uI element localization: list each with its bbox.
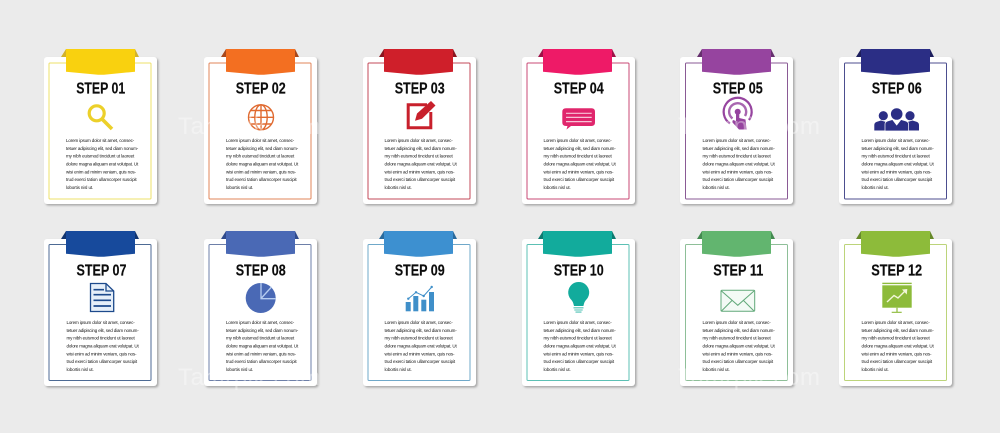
card: step 07: [44, 231, 158, 388]
body text: wisi enim ad minim veniam, quis nos-: [384, 351, 455, 356]
body text: dolore magna aliquam erat volutpat. Ut: [862, 162, 935, 166]
body text: tetuer adipiscing elit, sed diam nonum-: [702, 146, 775, 151]
body text: Lorem ipsum dolor sit amet, consec-: [66, 320, 135, 325]
body text: dolore magna aliquam erat volutpat. Ut: [544, 162, 617, 166]
icon: light bulb: [568, 282, 589, 312]
watermark text: Tamrpik.com: [178, 113, 320, 140]
card: step 12: [839, 231, 954, 388]
body text: my nibh euismod tincidunt ut laoreet: [544, 154, 613, 159]
body text: wisi enim ad minim veniam, quis nos-: [544, 351, 614, 356]
icon: envelope: [721, 290, 755, 311]
body text: dolore magna aliquam erat volutpat. Ut: [226, 344, 299, 348]
watermark text: Tamrpik.com: [178, 364, 320, 391]
card: step 04: [522, 49, 636, 206]
heading: STEP 04: [554, 80, 604, 98]
icon: magnifier: [89, 106, 112, 129]
body text: tetuer adipiscing elit, sed diam nonum-: [862, 328, 934, 333]
heading: STEP 06: [872, 80, 922, 98]
body text: lobortis nisl ut.: [544, 367, 571, 372]
icon: document: [90, 284, 114, 312]
body text: dolore magna aliquam erat volutpat. Ut: [384, 344, 458, 348]
body text: [544, 320, 617, 372]
body text: dolore magna aliquam erat volutpat. Ut: [384, 162, 458, 166]
body text: Lorem ipsum dolor sit amet, consec-: [702, 320, 771, 325]
body text: trud exerci tation ullamcorper suscipit: [384, 177, 456, 182]
body text: my nibh euismod tincidunt ut laoreet: [226, 336, 295, 341]
body text: lobortis nisl ut.: [544, 185, 571, 190]
body text: [702, 138, 776, 190]
icon: team of people: [874, 108, 919, 131]
body text: tetuer adipiscing elit, sed diam nonum-: [384, 328, 457, 333]
heading: STEP 03: [395, 80, 445, 98]
body text: trud exerci tation ullamcorper suscipit: [702, 177, 774, 182]
body text: [66, 320, 140, 372]
heading: STEP 05: [713, 80, 763, 98]
ribbon: [856, 49, 934, 75]
body text: trud exerci tation ullamcorper suscipit: [544, 177, 615, 182]
body text: tetuer adipiscing elit, sed diam nonum-: [702, 328, 775, 333]
ribbon: [61, 49, 139, 75]
body text: trud exerci tation ullamcorper suscipit: [66, 359, 138, 364]
body text: Lorem ipsum dolor sit amet, consec-: [544, 138, 612, 143]
body text: Lorem ipsum dolor sit amet, consec-: [226, 320, 295, 325]
ribbon: [221, 49, 299, 75]
body text: Lorem ipsum dolor sit amet, consec-: [544, 320, 612, 325]
body text: Lorem ipsum dolor sit amet, consec-: [226, 138, 295, 143]
body text: wisi enim ad minim veniam, quis nos-: [226, 169, 296, 174]
card: step 05: [680, 49, 794, 206]
heading: STEP 12: [871, 262, 922, 279]
heading: STEP 01: [76, 80, 125, 98]
body text: [66, 138, 139, 190]
body text: my nibh euismod tincidunt ut laoreet: [544, 336, 613, 341]
body text: Lorem ipsum dolor sit amet, consec-: [384, 320, 453, 325]
body text: [702, 320, 776, 372]
body text: lobortis nisl ut.: [66, 185, 93, 190]
body text: [862, 138, 935, 190]
body text: Lorem ipsum dolor sit amet, consec-: [66, 138, 135, 143]
card: step 01: [44, 49, 158, 206]
card: step 08: [204, 231, 318, 388]
body text: my nibh euismod tincidunt ut laoreet: [862, 154, 931, 159]
body text: lobortis nisl ut.: [66, 367, 94, 372]
body text: trud exerci tation ullamcorper suscipit: [702, 359, 774, 364]
body text: Lorem ipsum dolor sit amet, consec-: [862, 320, 930, 325]
body text: wisi enim ad minim veniam, quis nos-: [66, 169, 136, 174]
ribbon: [856, 231, 934, 257]
body text: dolore magna aliquam erat volutpat. Ut: [66, 162, 139, 166]
body text: trud exerci tation ullamcorper suscipit: [862, 177, 933, 182]
card: step 09: [363, 231, 478, 388]
card: step 06: [839, 49, 954, 206]
body text: my nibh euismod tincidunt ut laoreet: [66, 336, 136, 341]
body text: lobortis nisl ut.: [384, 185, 412, 190]
body text: [544, 138, 617, 190]
body text: dolore magna aliquam erat volutpat. Ut: [702, 344, 776, 348]
body text: Lorem ipsum dolor sit amet, consec-: [384, 138, 453, 143]
ribbon: [61, 231, 139, 257]
body text: lobortis nisl ut.: [862, 185, 889, 190]
body text: wisi enim ad minim veniam, quis nos-: [226, 351, 296, 356]
body text: dolore magna aliquam erat volutpat. Ut: [226, 162, 299, 166]
body text: tetuer adipiscing elit, sed diam nonum-: [544, 146, 616, 151]
body text: Lorem ipsum dolor sit amet, consec-: [862, 138, 930, 143]
icon: globe: [248, 105, 274, 130]
icon: speech bubble: [562, 108, 595, 130]
watermark text: Tamrpik.com: [678, 113, 820, 140]
body text: tetuer adipiscing elit, sed diam nonum-: [66, 146, 139, 151]
body text: Lorem ipsum dolor sit amet, consec-: [702, 138, 771, 143]
ribbon: [379, 49, 457, 75]
body text: tetuer adipiscing elit, sed diam nonum-: [544, 328, 616, 333]
icon: bar chart with trend line: [406, 286, 434, 311]
heading: STEP 11: [713, 262, 764, 279]
watermark text: [178, 113, 820, 391]
icon: touch target: [724, 98, 752, 130]
body text: tetuer adipiscing elit, sed diam nonum-: [66, 328, 139, 333]
body text: trud exerci tation ullamcorper suscipit: [384, 359, 456, 364]
body text: [226, 320, 299, 372]
body text: my nibh euismod tincidunt ut laoreet: [66, 154, 135, 159]
body text: wisi enim ad minim veniam, quis nos-: [702, 351, 773, 356]
body text: lobortis nisl ut.: [862, 367, 889, 372]
body text: [384, 138, 458, 190]
body text: lobortis nisl ut.: [702, 185, 730, 190]
body text: [384, 320, 458, 372]
body text: tetuer adipiscing elit, sed diam nonum-: [226, 146, 299, 151]
body text: lobortis nisl ut.: [226, 367, 253, 372]
body text: lobortis nisl ut.: [226, 185, 253, 190]
ribbon: [221, 231, 299, 257]
body text: tetuer adipiscing elit, sed diam nonum-: [226, 328, 299, 333]
body text: trud exerci tation ullamcorper suscipit: [226, 359, 297, 364]
body text: trud exerci tation ullamcorper suscipit: [862, 359, 933, 364]
body text: [226, 138, 299, 190]
body text: wisi enim ad minim veniam, quis nos-: [384, 169, 455, 174]
heading: STEP 09: [395, 262, 445, 279]
ribbon: [697, 49, 775, 75]
body text: wisi enim ad minim veniam, quis nos-: [862, 169, 932, 174]
watermark text: Tamrpik.com: [678, 364, 820, 391]
body text: trud exerci tation ullamcorper suscipit: [544, 359, 615, 364]
body text: wisi enim ad minim veniam, quis nos-: [702, 169, 773, 174]
icon: pie chart: [246, 283, 276, 313]
ribbon: [538, 231, 616, 257]
heading: STEP 10: [554, 262, 604, 279]
body text: trud exerci tation ullamcorper suscipit: [226, 177, 297, 182]
ribbon: [697, 231, 775, 257]
body text: my nibh euismod tincidunt ut laoreet: [702, 154, 772, 159]
icon: edit pencil: [408, 101, 436, 128]
body text: my nibh euismod tincidunt ut laoreet: [384, 336, 454, 341]
body text: my nibh euismod tincidunt ut laoreet: [226, 154, 295, 159]
body text: trud exerci tation ullamcorper suscipit: [66, 177, 137, 182]
card: step 02: [204, 49, 318, 206]
card: step 10: [522, 231, 636, 388]
body text: dolore magna aliquam erat volutpat. Ut: [702, 162, 776, 166]
body text: my nibh euismod tincidunt ut laoreet: [862, 336, 931, 341]
heading: STEP 08: [236, 262, 286, 279]
body text: [862, 320, 935, 372]
body text: lobortis nisl ut.: [384, 367, 412, 372]
card: step 03: [363, 49, 478, 206]
body text: dolore magna aliquam erat volutpat. Ut: [544, 344, 617, 348]
body text: my nibh euismod tincidunt ut laoreet: [702, 336, 772, 341]
body text: lobortis nisl ut.: [702, 367, 730, 372]
body text: dolore magna aliquam erat volutpat. Ut: [66, 344, 140, 348]
body text: dolore magna aliquam erat volutpat. Ut: [862, 344, 935, 348]
card: step 11: [680, 231, 794, 388]
body text: my nibh euismod tincidunt ut laoreet: [384, 154, 454, 159]
body text: tetuer adipiscing elit, sed diam nonum-: [384, 146, 457, 151]
body text: wisi enim ad minim veniam, quis nos-: [66, 351, 137, 356]
ribbon: [379, 231, 457, 257]
body text: wisi enim ad minim veniam, quis nos-: [544, 169, 614, 174]
body text: tetuer adipiscing elit, sed diam nonum-: [862, 146, 934, 151]
heading: STEP 02: [236, 80, 286, 98]
body text: wisi enim ad minim veniam, quis nos-: [862, 351, 932, 356]
icon: presentation board: [882, 283, 912, 312]
ribbon: [538, 49, 616, 75]
heading: STEP 07: [76, 262, 126, 279]
